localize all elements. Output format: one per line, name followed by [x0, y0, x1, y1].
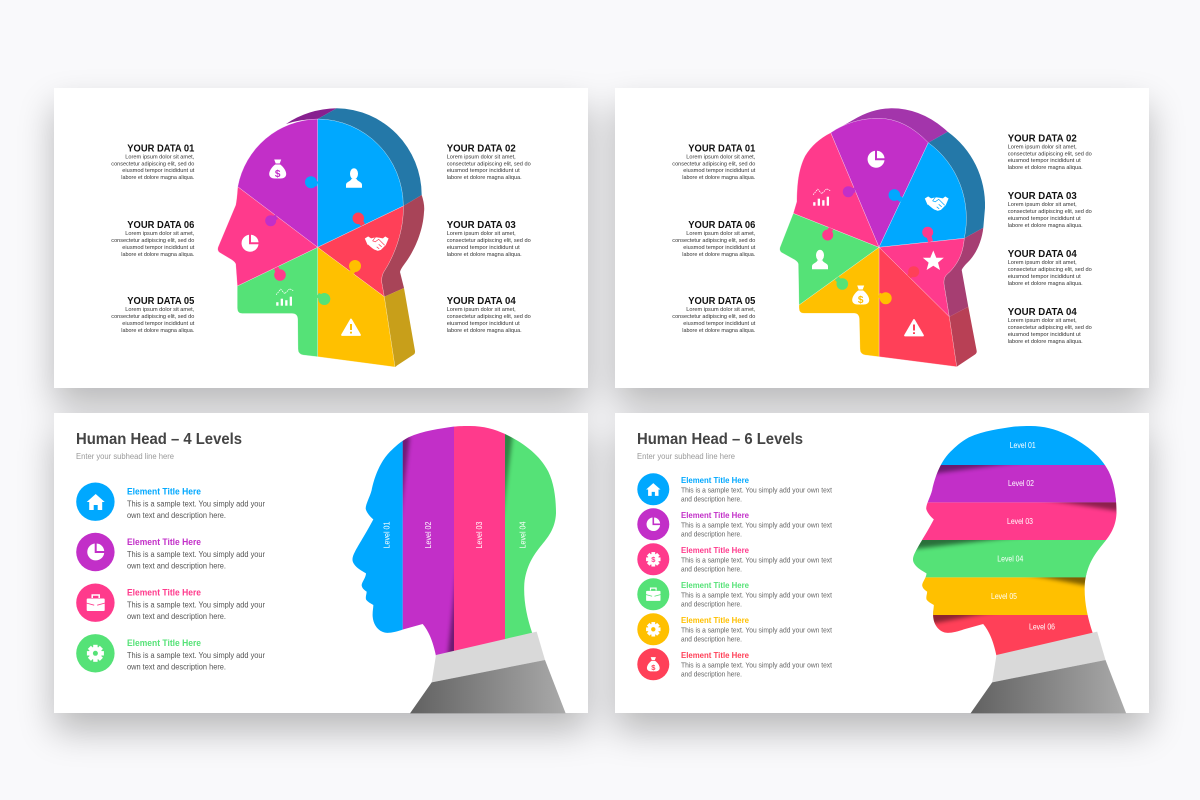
right text: your data 02	[1008, 132, 1092, 171]
list item 5: Element Title Here	[681, 615, 749, 625]
icon: handshake	[924, 196, 949, 211]
list item 3: Element Title Here	[127, 588, 201, 598]
right text: your data 04: labore et dolore magna aliqua.	[1008, 281, 1083, 287]
icon: star	[923, 250, 944, 270]
left text: your data 05: labore et dolore magna aliqua.	[682, 328, 756, 334]
list item 1: and description here.	[681, 497, 742, 504]
list item 1: This is a sample text. You simply add your own text	[681, 488, 832, 495]
list item 2	[637, 508, 832, 540]
right text: your data 02: YOUR DATA 02	[1008, 132, 1077, 144]
left text: your data 06: Lorem ipsum dolor sit amet,	[686, 231, 756, 237]
right text: your data 04 second: eiusmod tempor incididunt ut	[1008, 332, 1081, 338]
icon: warning	[342, 320, 360, 335]
right text: your data 03: labore et dolore magna aliqua.	[1008, 223, 1083, 229]
left text: your data 05: eiusmod tempor incididunt ut	[683, 321, 756, 327]
left text: your data 06: consectetur adipiscing elit, sed do	[111, 238, 194, 244]
list item 3: $	[651, 555, 656, 564]
left text: your data 05	[111, 295, 195, 334]
left text: your data 06: eiusmod tempor incididunt ut	[683, 245, 756, 251]
left text: your data 05: Lorem ipsum dolor sit amet,	[686, 307, 756, 313]
panel: head puzzle with 7 pieces	[615, 88, 1149, 388]
icon: pie chart	[868, 151, 884, 168]
list item 2	[76, 533, 265, 571]
left text: your data 06	[111, 219, 195, 258]
right text: your data 02: labore et dolore magna aliqua.	[447, 175, 522, 181]
left text: your data 06: YOUR DATA 06	[127, 219, 194, 231]
left text: your data 01: Lorem ipsum dolor sit amet,	[686, 154, 756, 160]
left text: your data 05: labore et dolore magna aliqua.	[121, 328, 195, 334]
left text: your data 06: eiusmod tempor incididunt ut	[122, 245, 195, 251]
list item 4: This is a sample text. You simply add your	[127, 651, 265, 660]
right text: your data 03: Lorem ipsum dolor sit amet,	[447, 231, 516, 237]
heading: Human Head – 6 Levels	[637, 431, 803, 448]
list item 3: Element Title Here	[681, 545, 749, 555]
left text: your data 01: eiusmod tempor incididunt ut	[683, 168, 756, 174]
panel shadows	[54, 106, 1149, 731]
puzzle tabs	[265, 176, 364, 305]
left text: your data 01: YOUR DATA 01	[688, 142, 755, 154]
list item 6	[637, 648, 832, 680]
left text: your data 01: labore et dolore magna aliqua.	[682, 175, 756, 181]
level labels: Level 05	[991, 592, 1017, 601]
level labels: Level 06	[1029, 622, 1055, 631]
right text: your data 03: eiusmod tempor incididunt ut	[1008, 216, 1081, 222]
left text: your data 05: Lorem ipsum dolor sit amet,	[125, 307, 195, 313]
right text: your data 03: consectetur adipiscing elit, sed do	[1008, 209, 1092, 215]
right text: your data 04: YOUR DATA 04	[447, 295, 516, 307]
right text: your data 04: consectetur adipiscing elit, sed do	[447, 314, 531, 320]
level labels: Level 02	[1008, 479, 1034, 488]
list item 5: and description here.	[681, 637, 742, 644]
right text: your data 04 second: YOUR DATA 04	[1008, 306, 1077, 318]
left text: your data 05: consectetur adipiscing elit, sed do	[111, 314, 194, 320]
right text: your data 04	[447, 295, 531, 334]
left text: your data 06: labore et dolore magna aliqua.	[121, 252, 195, 258]
list item 3	[637, 543, 832, 575]
list item 4	[637, 578, 832, 610]
right text: your data 02: eiusmod tempor incididunt ut	[447, 168, 520, 174]
right text: your data 02: consectetur adipiscing elit, sed do	[1008, 151, 1092, 157]
list item 6: Element Title Here	[681, 650, 749, 660]
left text: your data 05: consectetur adipiscing elit, sed do	[672, 314, 755, 320]
level labels: Level 01	[382, 521, 392, 548]
list item 2: own text and description here.	[127, 562, 226, 570]
right text: your data 04: YOUR DATA 04	[1008, 248, 1077, 260]
puzzle head	[218, 108, 424, 367]
right text: your data 04: eiusmod tempor incididunt ut	[1008, 274, 1081, 280]
left text: your data 06: labore et dolore magna aliqua.	[682, 252, 756, 258]
level labels	[382, 521, 528, 548]
list item 3: This is a sample text. You simply add your	[127, 600, 265, 610]
right text: your data 03: Lorem ipsum dolor sit amet,	[1008, 202, 1077, 208]
list item 2: Element Title Here	[127, 537, 201, 547]
left text: your data 06: YOUR DATA 06	[688, 219, 755, 231]
list item 1: Element Title Here	[681, 475, 749, 485]
level labels: Level 01	[1010, 441, 1036, 450]
list item 1	[637, 473, 832, 505]
list item 3: own text and description here.	[127, 612, 226, 621]
right text: your data 02: Lorem ipsum dolor sit amet,	[447, 154, 516, 160]
icon: money bag: $	[858, 295, 864, 306]
level labels: Level 03	[475, 521, 484, 548]
right text: your data 02: eiusmod tempor incididunt ut	[1008, 158, 1081, 164]
right text: your data 04: consectetur adipiscing elit, sed do	[1008, 267, 1092, 273]
right text: your data 04 second: labore et dolore magna aliqua.	[1008, 339, 1083, 345]
right text: your data 04 second	[1008, 306, 1092, 345]
left text: your data 01: labore et dolore magna aliqua.	[121, 175, 195, 181]
right text: your data 02	[447, 142, 531, 181]
left text: your data 01	[672, 142, 756, 181]
right text: your data 03: YOUR DATA 03	[447, 219, 516, 231]
right text: your data 03	[447, 219, 531, 258]
right text: your data 02: YOUR DATA 02	[447, 142, 516, 154]
list item 5	[637, 613, 832, 645]
icon: handshake	[364, 236, 389, 251]
list item 2: This is a sample text. You simply add your own text	[681, 523, 832, 530]
head with horizontal levels	[913, 426, 1126, 714]
list item 4	[76, 634, 265, 672]
icon: person	[346, 168, 362, 188]
puzzle head	[780, 108, 985, 367]
list item 3: This is a sample text. You simply add your own text	[681, 558, 832, 565]
list item 4: own text and description here.	[127, 662, 226, 672]
left text: your data 05: YOUR DATA 05	[127, 295, 194, 307]
icon: bar chart	[276, 289, 293, 306]
list item 4: and description here.	[681, 602, 742, 609]
list item 3	[76, 584, 265, 622]
left text: your data 06: Lorem ipsum dolor sit amet,	[125, 231, 195, 237]
icon: pie chart	[242, 235, 258, 252]
right text: your data 04	[1008, 248, 1092, 287]
left text: your data 01: YOUR DATA 01	[127, 142, 194, 154]
head with vertical levels	[340, 420, 578, 713]
level labels	[991, 441, 1055, 631]
list item 5: This is a sample text. You simply add your own text	[681, 628, 832, 635]
heading: Human Head – 4 Levels	[76, 431, 242, 448]
panel: human head 6 levels	[615, 413, 1149, 713]
right text: your data 02: labore et dolore magna aliqua.	[1008, 165, 1083, 171]
panel: human head 4 levels	[54, 413, 588, 713]
left text: your data 01: Lorem ipsum dolor sit amet,	[125, 154, 195, 160]
left text: your data 01	[111, 142, 195, 181]
list item 6: $	[651, 663, 656, 672]
left text: your data 05: eiusmod tempor incididunt ut	[122, 321, 195, 327]
right text: your data 03	[1008, 190, 1092, 229]
level labels: Level 04	[518, 521, 528, 548]
list item 2: and description here.	[681, 532, 742, 539]
list item 2: Element Title Here	[681, 510, 749, 520]
level labels: Level 03	[1007, 517, 1033, 526]
subheading: Enter your subhead line here	[76, 452, 175, 461]
right text: your data 04: Lorem ipsum dolor sit amet,	[447, 307, 516, 313]
right text: your data 03: labore et dolore magna aliqua.	[447, 252, 522, 258]
icon: money bag	[269, 160, 286, 180]
right text: your data 03: YOUR DATA 03	[1008, 190, 1077, 202]
left text: your data 06	[672, 219, 756, 258]
icon: bar chart	[813, 189, 830, 206]
icon: money bag: $	[275, 169, 281, 180]
list item 2: This is a sample text. You simply add your	[127, 550, 265, 559]
left text: your data 01: eiusmod tempor incididunt ut	[122, 168, 195, 174]
right text: your data 04: labore et dolore magna aliqua.	[447, 328, 522, 334]
list item 6: This is a sample text. You simply add your own text	[681, 663, 832, 670]
list item 6: and description here.	[681, 672, 742, 679]
puzzle tabs	[822, 186, 933, 304]
left text: your data 01: consectetur adipiscing elit, sed do	[111, 161, 194, 167]
left text: your data 05	[672, 295, 756, 334]
level labels: Level 04	[997, 554, 1024, 563]
list item 4: Element Title Here	[127, 638, 201, 648]
right text: your data 02: Lorem ipsum dolor sit amet,	[1008, 144, 1077, 150]
right text: your data 04: Lorem ipsum dolor sit amet,	[1008, 260, 1077, 266]
panel: head puzzle with 6 pieces	[54, 88, 588, 388]
icon: warning	[905, 320, 923, 336]
list item 1: Element Title Here	[127, 486, 201, 496]
level labels: Level 02	[424, 521, 433, 548]
left text: your data 05: YOUR DATA 05	[688, 295, 755, 307]
left text: your data 06: consectetur adipiscing elit, sed do	[672, 238, 755, 244]
list item 4: Element Title Here	[681, 580, 749, 590]
list item 1: This is a sample text. You simply add your	[127, 500, 265, 508]
right text: your data 04 second: consectetur adipiscing elit, sed do	[1008, 325, 1092, 331]
subheading: Enter your subhead line here	[637, 452, 736, 461]
list item 1: own text and description here.	[127, 511, 226, 520]
list item 4: This is a sample text. You simply add your own text	[681, 593, 832, 600]
list item 1	[76, 482, 265, 521]
left text: your data 01: consectetur adipiscing elit, sed do	[672, 161, 755, 167]
right text: your data 02: consectetur adipiscing elit, sed do	[447, 161, 531, 167]
right text: your data 04 second: Lorem ipsum dolor sit amet,	[1008, 318, 1077, 324]
right text: your data 03: eiusmod tempor incididunt ut	[447, 245, 520, 251]
icon: person	[812, 250, 828, 269]
icon: money bag	[852, 286, 869, 306]
list item 3: and description here.	[681, 567, 742, 574]
right text: your data 04: eiusmod tempor incididunt ut	[447, 321, 520, 327]
right text: your data 03: consectetur adipiscing elit, sed do	[447, 238, 531, 244]
